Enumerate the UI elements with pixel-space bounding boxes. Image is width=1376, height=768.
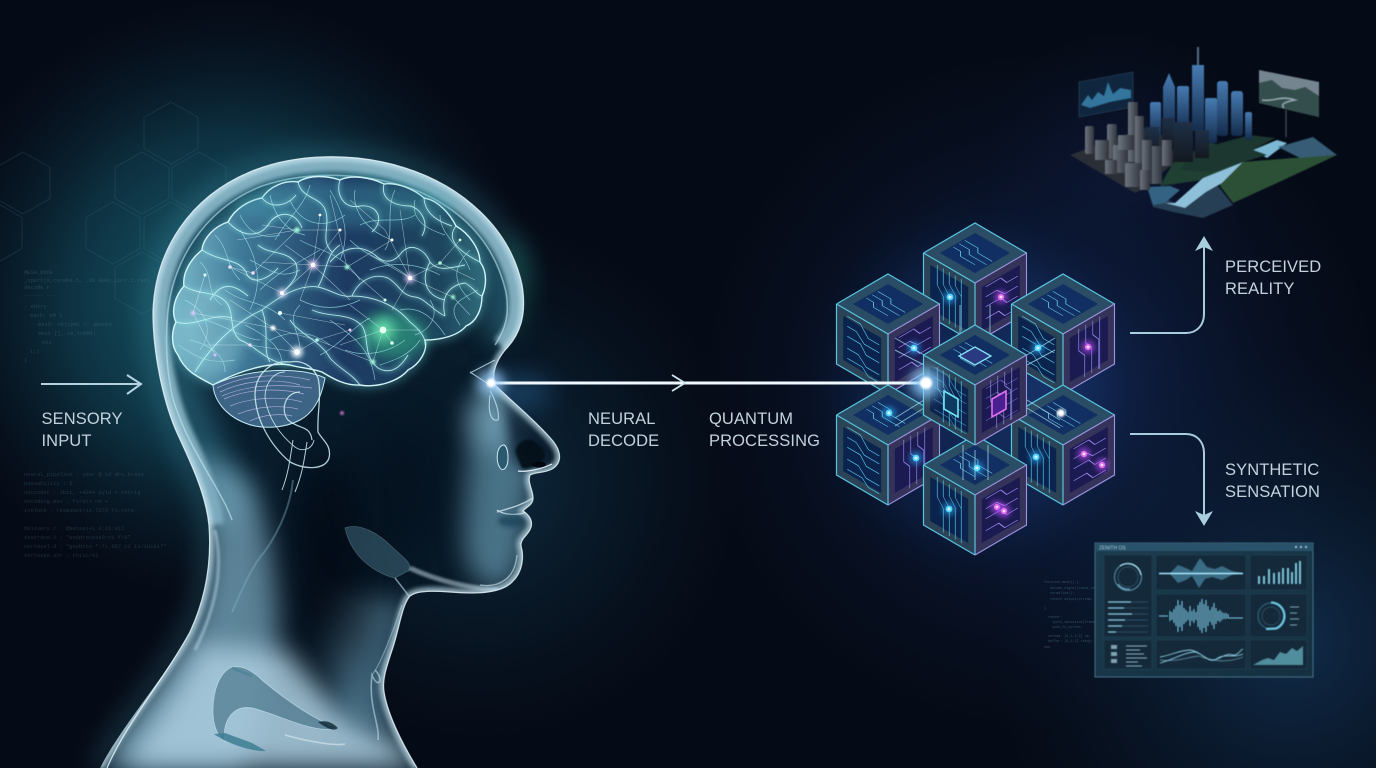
- label: neural decode: NEURAL: [588, 410, 656, 428]
- skull shell band: [153, 157, 524, 525]
- connector traces: [895, 305, 1060, 480]
- label: perceived reality: REALITY: [1225, 280, 1294, 298]
- faint code next to dashboard: end: [1044, 645, 1050, 650]
- faint code block: bottom left: cortexsl.d : "gnabrtn *:f1.057 c2 11/1H1617": [24, 544, 166, 550]
- faint code next to dashboard: synth_sensation(frames, delay);: [1052, 620, 1115, 625]
- faint code block: top left: _xpert[0,core64.5, .35 0001.LO/c,c.ret]: [23, 278, 150, 284]
- neuron nodes: [191, 214, 461, 415]
- face shading: [462, 370, 535, 590]
- dashboard panel: [1095, 543, 1313, 677]
- faint code block: top left: ok1: [42, 340, 52, 346]
- faint code block: top left: i;): [30, 349, 40, 355]
- dial gauge: [1114, 564, 1142, 590]
- faint code next to dashboard: decode_signal(input_stream, buffer): [1050, 586, 1121, 591]
- sub panels: [1104, 555, 1307, 669]
- faint code next to dashboard: return output(stream, latency_ms);: [1050, 597, 1119, 602]
- faint code next to dashboard: - render:: [1044, 615, 1062, 620]
- cube: lower right: [1012, 385, 1114, 505]
- icon list: [1111, 645, 1147, 666]
- cube: centre: [924, 325, 1026, 445]
- faint code block: bottom left: [24, 472, 166, 559]
- faint code block: top left: each: bM 1: [30, 313, 62, 319]
- faint code block: top left: }: [24, 358, 27, 364]
- brain: [172, 176, 486, 492]
- faint code block: top left: MESH_NODE: [24, 270, 53, 276]
- cortical fold glow: [176, 180, 482, 385]
- faint code next to dashboard: stream: [0,1,2,3] ok;: [1048, 634, 1091, 639]
- faint code block: bottom left: delivery.c : @sense1+1 0:15:012: [24, 526, 124, 532]
- throat detail: [345, 526, 498, 600]
- label: quantum processing: QUANTUM: [709, 410, 793, 428]
- upper lobe tint: [235, 183, 455, 227]
- faint code next to dashboard: [1044, 580, 1121, 650]
- hologram panel: landscape: [1259, 70, 1319, 137]
- faint code block: top left: emit [], ce,tchM1;: [38, 331, 96, 337]
- dashboard title: ZENITH OS: [1099, 546, 1126, 552]
- shoulder light mass: [120, 645, 420, 768]
- faint code block: top left: [23, 270, 150, 364]
- blue skyscrapers: [1150, 47, 1252, 143]
- faint code block: bottom left: neural_pipeline : your @ 1d drv.brain: [24, 472, 144, 478]
- cerebellum: [213, 370, 325, 427]
- area chart: [1253, 646, 1303, 665]
- label: sensory input: SENSORY: [42, 410, 123, 428]
- label: sensory input: INPUT: [42, 432, 92, 450]
- faint code block: top left: ------ ---: [24, 293, 56, 299]
- terrain: [1070, 128, 1175, 193]
- face details: [497, 445, 508, 470]
- faint code next to dashboard: function.main() {: [1044, 580, 1079, 585]
- head glow halo: [100, 157, 552, 768]
- faint code block: top left: - entry: [24, 304, 47, 310]
- faint code next to dashboard: send_to_cortex;: [1052, 625, 1083, 630]
- collar capsule: [213, 667, 345, 751]
- cortical folds: [176, 180, 482, 385]
- neck back band: [100, 450, 282, 768]
- label: synthetic sensation: SYNTHETIC: [1225, 461, 1319, 479]
- faint code block: bottom left: passability : $: [24, 481, 73, 487]
- human head and neck silhouette: [100, 157, 560, 768]
- label: perceived reality: PERCEIVED: [1225, 258, 1321, 276]
- arrow: sensory input: [41, 375, 141, 394]
- waveform two: [1159, 599, 1243, 633]
- quantum cube cluster: [836, 223, 1114, 555]
- label: synthetic sensation: SENSATION: [1225, 483, 1320, 501]
- hexagon background pattern: [0, 102, 226, 314]
- faint code next to dashboard: }: [1044, 606, 1046, 611]
- light beam from eye to cube: [478, 368, 941, 398]
- faint code block: top left: mesh: ch(cpM1 !- amount: [38, 322, 112, 328]
- glow behind cubes: [845, 240, 1105, 540]
- faint code block: bottom left: vortexpo.aVr : thisL/01: [24, 553, 98, 559]
- cube: lower left: [836, 385, 940, 505]
- hologram panel: waveform: [1079, 72, 1133, 117]
- synaptic network: [193, 195, 475, 362]
- label: quantum processing: PROCESSING: [709, 432, 820, 450]
- cube: upper right: [1012, 274, 1114, 394]
- arrow: synthetic sensation: [1130, 434, 1213, 526]
- cube: upper left: [836, 274, 940, 394]
- faint code next to dashboard: buffer: [0,1,2] ready;: [1048, 639, 1093, 644]
- inner skull contour: [167, 175, 507, 520]
- faint code block: bottom left: outcodec : 1bit, +4044 pyld + retrig: [24, 490, 140, 496]
- inner teal falloff under skull: [153, 157, 524, 525]
- outline inner glow: [100, 157, 560, 768]
- grey buildings: [1085, 102, 1172, 190]
- label: neural decode: DECODE: [588, 432, 659, 450]
- line chart: [1160, 649, 1243, 663]
- list bars: [1108, 602, 1148, 632]
- donut chart: [1258, 602, 1299, 629]
- neck inner lines: [195, 530, 218, 650]
- ear loop and brain stem: [255, 362, 330, 492]
- arrow: perceived reality: [1130, 236, 1213, 333]
- green glow: [358, 311, 426, 359]
- faint code block: top left: decode.r: [24, 285, 50, 291]
- dense fine web: [178, 185, 478, 380]
- bar chart: [1258, 561, 1301, 584]
- crisp outline: [107, 157, 560, 768]
- faint code next to dashboard: normalize();: [1050, 591, 1074, 596]
- faint code block: bottom left: testrdce.1 : "undprocess0:c1 f:0": [24, 535, 131, 541]
- cube: bottom: [924, 435, 1026, 555]
- waveform one: [1159, 558, 1243, 588]
- faint code block: bottom left: inblock : resmumatrix.7370 fn.core: [24, 508, 134, 514]
- dark mid buildings: [1145, 118, 1209, 162]
- city and landscape floating model: [1070, 47, 1337, 218]
- faint code block: bottom left: encoding.max : first1 nn +: [24, 499, 108, 505]
- cube: top: [924, 223, 1026, 343]
